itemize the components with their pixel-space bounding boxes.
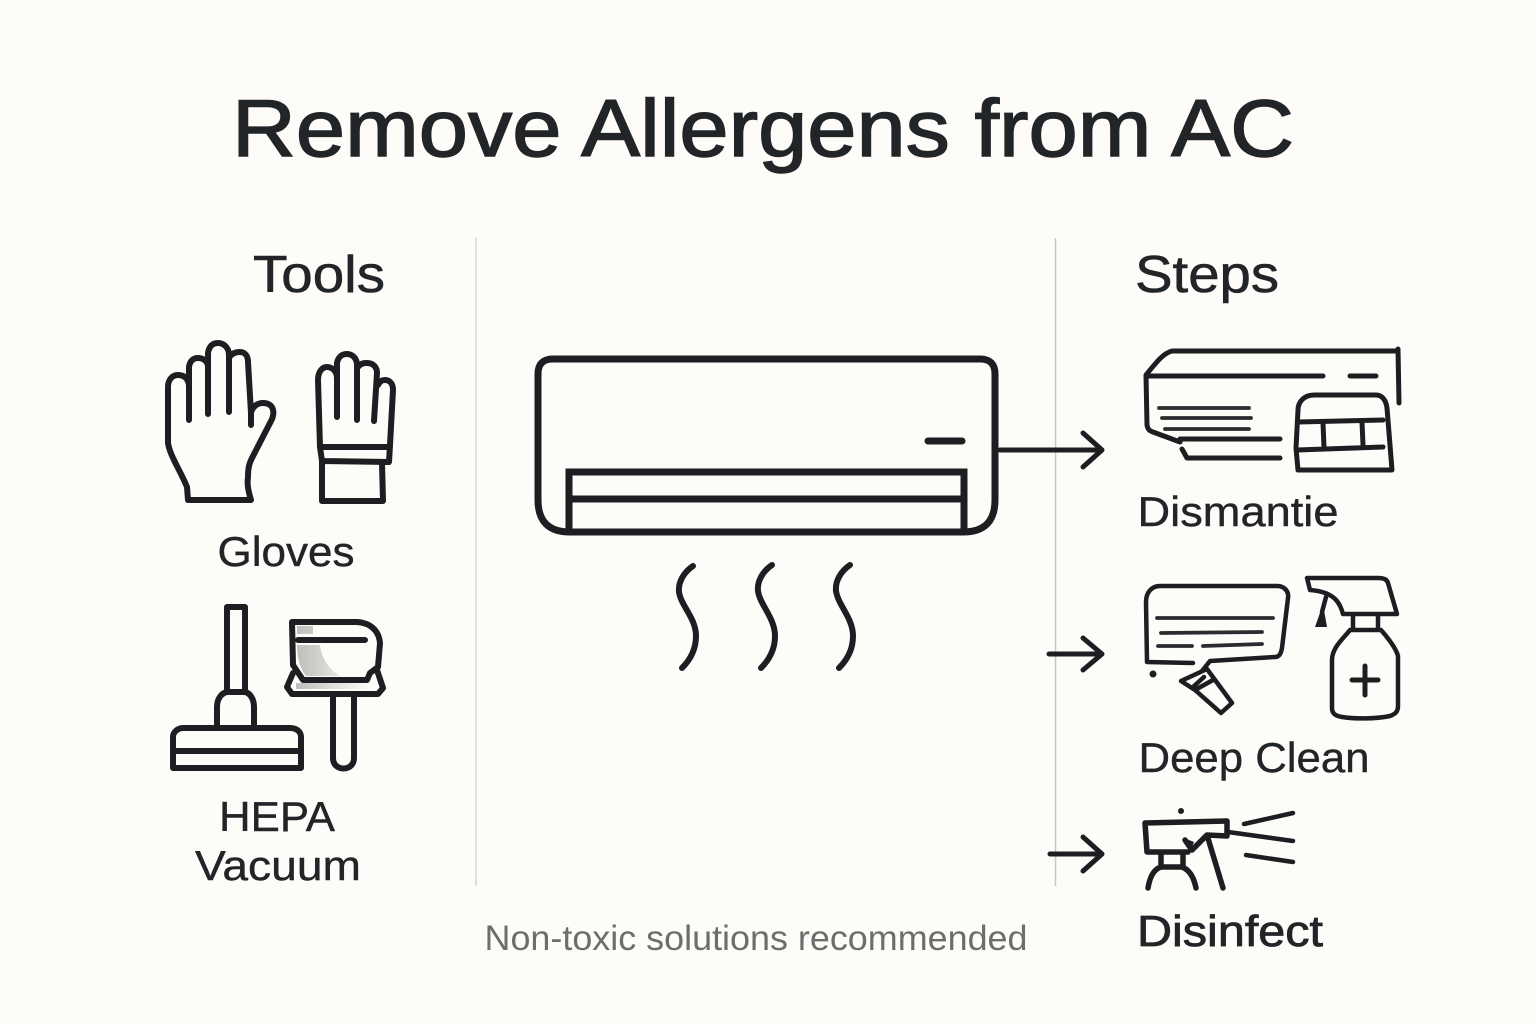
- cleaning nozzle: [1181, 669, 1232, 713]
- heading: tools: Tools: [253, 246, 385, 304]
- AC body: [538, 359, 995, 532]
- icon: dismantle: [1146, 349, 1399, 470]
- icon: vacuum filter brush: [287, 622, 383, 768]
- icon: open glove: [168, 343, 273, 500]
- title: Remove Allergens from AC: [232, 84, 1294, 174]
- icon: deep clean: [1146, 578, 1398, 718]
- label: dismantle: Dismantie: [1138, 488, 1338, 535]
- icon: gloves: [168, 343, 393, 501]
- icon: HEPA vacuum: [173, 607, 383, 768]
- arrow: to disinfect: [1050, 837, 1102, 871]
- arrow: to deep clean: [1049, 638, 1102, 670]
- arrow: to dismantle: [1000, 433, 1102, 467]
- icon: disinfect sprayer: [1145, 808, 1293, 888]
- spray bottle: [1307, 578, 1398, 718]
- label: disinfect: Disinfect: [1137, 907, 1323, 956]
- label: deep clean: Deep Clean: [1138, 734, 1370, 781]
- AC panel: [1146, 586, 1288, 671]
- icon: vacuum floor head: [173, 607, 301, 768]
- AC indicator light: [928, 438, 962, 444]
- AC vent: [569, 472, 964, 532]
- panel slats: [1157, 618, 1273, 646]
- label: HEPA vacuum: HEPA: [219, 793, 335, 840]
- label: HEPA vacuum: Vacuum: [195, 842, 361, 889]
- illustration: air conditioner: [538, 359, 995, 668]
- icon: cuffed glove: [318, 354, 393, 501]
- air flow waves: [679, 565, 853, 668]
- label: gloves: Gloves: [218, 528, 354, 575]
- brush shading: [296, 626, 368, 689]
- dot: [1150, 670, 1156, 678]
- label: HEPA vacuum: [195, 793, 361, 889]
- heading: steps: Steps: [1135, 246, 1279, 304]
- footnote: Non-toxic solutions recommended: [484, 919, 1028, 958]
